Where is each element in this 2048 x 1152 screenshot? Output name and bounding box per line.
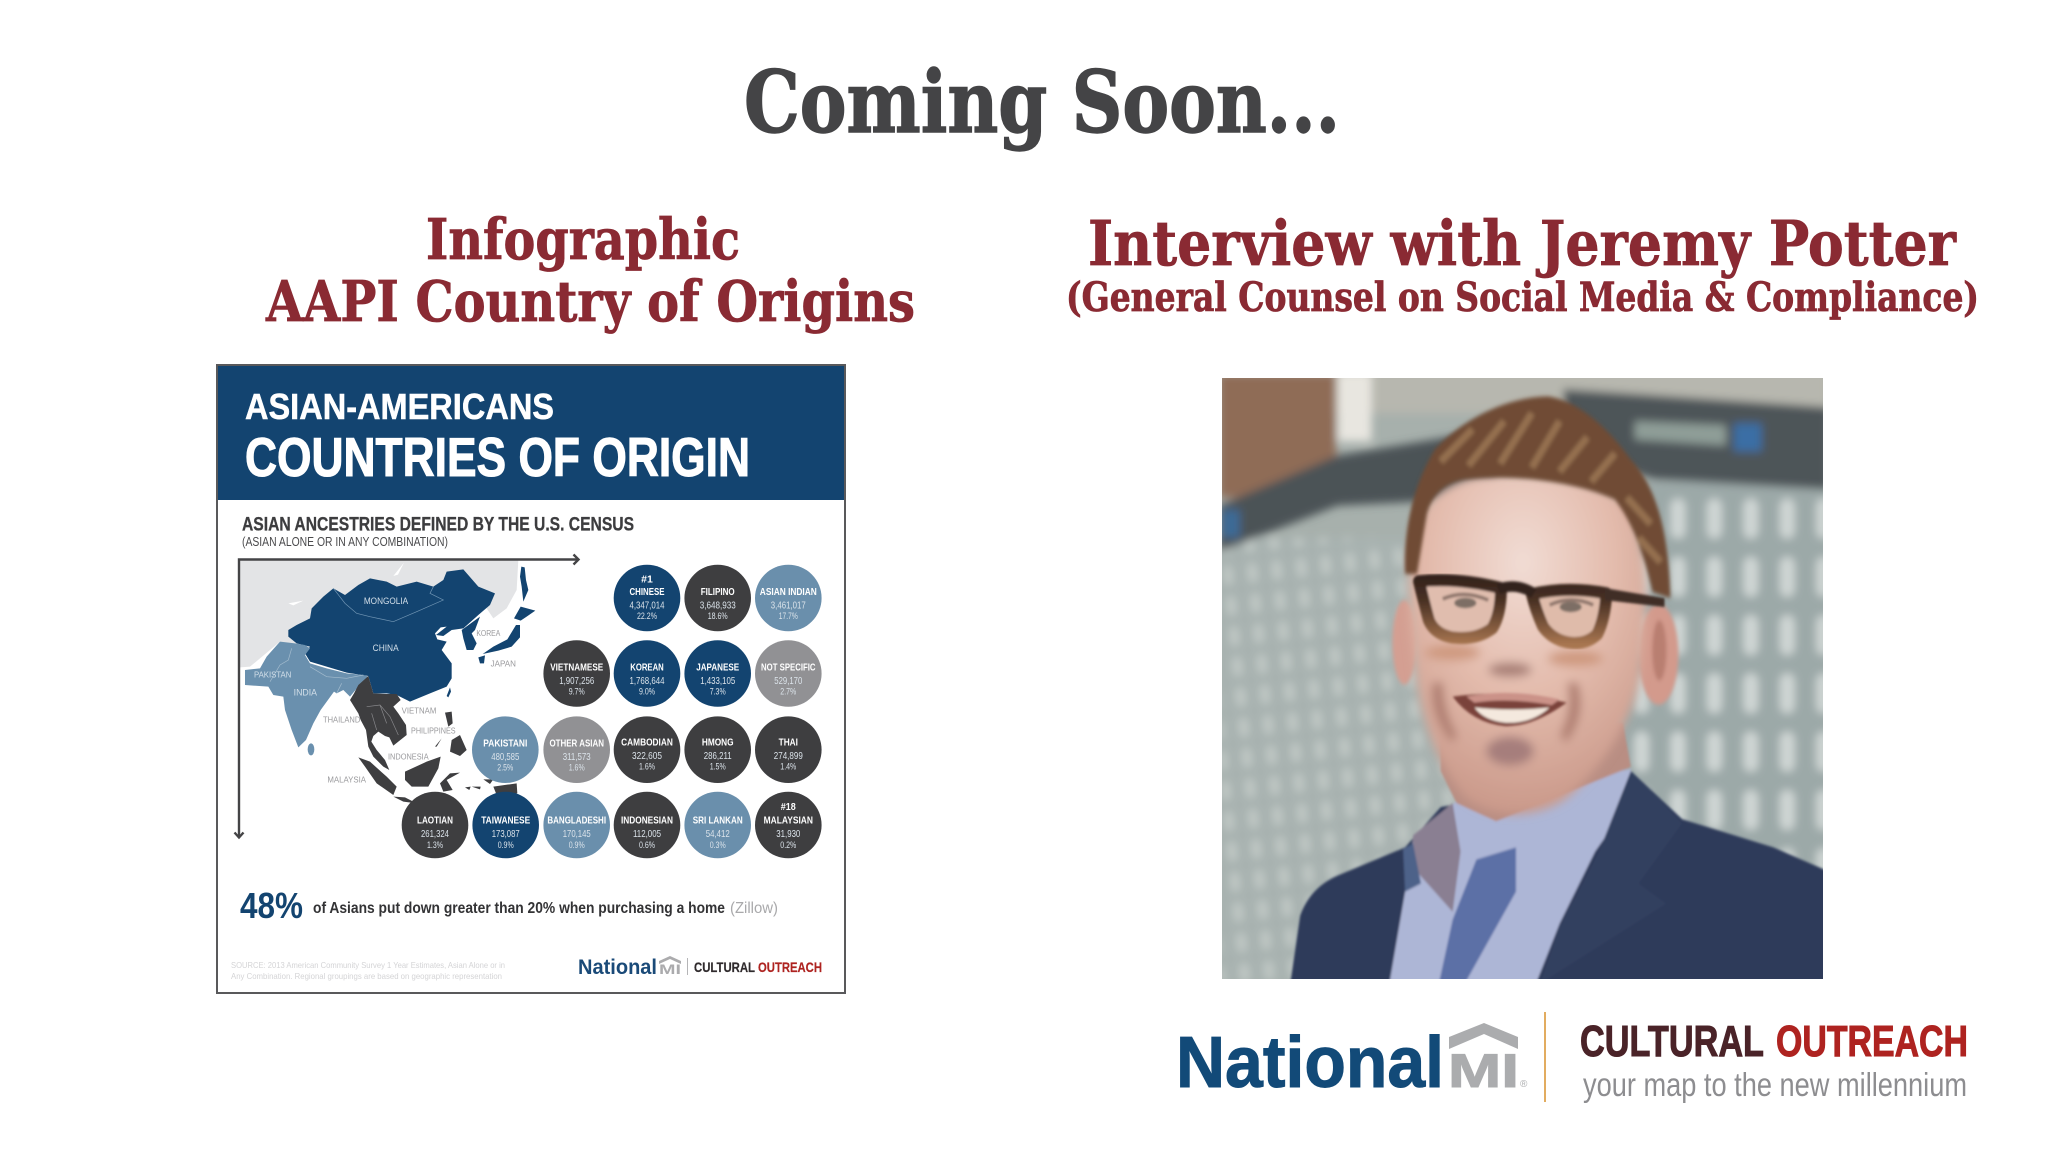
source note: SOURCE: 2013 American Community Survey 1 Year Estimates, Asian Alone or in: [231, 960, 505, 970]
bubble: Other Asian: OTHER ASIAN: [549, 738, 604, 750]
heading: interview: [1066, 207, 1979, 321]
map labels: PAKISTAN: [254, 670, 291, 680]
map labels: INDONESIA: [388, 752, 429, 762]
small logo: National: [578, 956, 657, 979]
bubble: Laotian: 261,324: [421, 828, 449, 840]
bubble: Bangladeshi: BANGLADESHI: [547, 814, 606, 826]
bubble: Asian Indian: ASIAN INDIAN: [760, 586, 817, 598]
map labels: MALAYSIA: [327, 774, 366, 784]
heading: infographic: AAPI Country of Origins: [265, 269, 915, 335]
bubble: Sri Lankan: [684, 792, 751, 858]
card subheading: [242, 514, 634, 549]
bubble: Pakistani: 2.5%: [497, 763, 513, 773]
small logo: [578, 956, 822, 979]
card header band: ASIAN-AMERICANS: [245, 386, 554, 427]
suit and shirt: [1290, 723, 1829, 984]
map labels: KOREA: [476, 628, 501, 638]
bubble: Taiwanese: [472, 792, 539, 858]
bubble: Filipino: 18.6%: [708, 611, 728, 621]
bubble: Not Specific: NOT SPECIFIC: [761, 662, 816, 674]
source note: [231, 960, 505, 981]
bubble: Pakistani: PAKISTANI: [483, 738, 527, 750]
bubble: Taiwanese: TAIWANESE: [481, 814, 530, 826]
bubble: Korean: 9.0%: [639, 686, 655, 696]
ears: [1392, 600, 1678, 705]
map labels: MONGOLIA: [364, 596, 408, 606]
bubble: Chinese: 4,347,014: [630, 599, 665, 611]
bubble: Not Specific: [755, 640, 822, 707]
bubble: Not Specific: 529,170: [774, 675, 802, 687]
bubble: Laotian: [402, 792, 468, 858]
bubble: Thai: 1.4%: [780, 762, 796, 772]
bubble: Sri Lankan: 54,412: [706, 828, 730, 840]
smile: [1453, 693, 1567, 726]
bubble: Malaysian: [755, 792, 822, 858]
bubble: Asian Indian: [755, 565, 822, 631]
bubble: Indonesian: INDONESIAN: [621, 814, 673, 826]
bubble: Sri Lankan: SRI LANKAN: [693, 814, 743, 826]
bubble: Cambodian: 1.6%: [639, 762, 655, 772]
card subheading: (ASIAN ALONE OR IN ANY COMBINATION): [242, 535, 448, 549]
bubble: Cambodian: 322,605: [632, 750, 662, 762]
bubble: Malaysian: #18: [781, 801, 796, 813]
bubble: Korean: [614, 640, 680, 707]
National MI wordmark: National: [1176, 1023, 1444, 1103]
map labels: JAPAN: [491, 659, 516, 669]
bubble: Other Asian: 1.6%: [569, 763, 585, 773]
bubble: Cambodian: CAMBODIAN: [621, 737, 673, 749]
map labels: CHINA: [373, 643, 399, 653]
bubble: Sri Lankan: 0.3%: [710, 840, 726, 850]
bubble: Filipino: FILIPINO: [701, 586, 735, 598]
bubble: Korean: 1,768,644: [630, 675, 665, 687]
map of Asia: [240, 560, 535, 803]
Cultural Outreach wordmark: [1580, 1017, 1968, 1103]
map labels: [254, 596, 516, 784]
bubble: Bangladeshi: [543, 792, 610, 858]
bubble: Asian Indian: 3,461,017: [771, 599, 806, 611]
bubble: Cambodian: [614, 716, 680, 783]
bubble: Thai: THAI: [779, 737, 798, 749]
map labels: INDIA: [294, 688, 317, 698]
bubble: Filipino: [684, 565, 751, 631]
card subheading: ASIAN ANCESTRIES DEFINED BY THE U.S. CENSUS: [242, 514, 634, 536]
bubble: Hmong: [684, 716, 751, 783]
bubble: Hmong: 1.5%: [710, 762, 726, 772]
bubble: Hmong: HMONG: [702, 737, 734, 749]
bubble: Chinese: #1: [641, 573, 653, 585]
statistic callout: of Asians put down greater than 20% when purchasing a home: [313, 900, 725, 917]
bubble: Taiwanese: 173,087: [492, 828, 520, 840]
map labels: THAILAND: [323, 714, 360, 724]
bubble: Asian Indian: 17.7%: [779, 611, 798, 621]
statistic callout: [240, 885, 778, 926]
glasses: [1419, 580, 1664, 643]
bubble: Bangladeshi: 0.9%: [569, 840, 585, 850]
Southeast Asia: [350, 676, 407, 770]
small logo: MI: [659, 961, 681, 977]
bubble: Indonesian: 0.6%: [639, 840, 655, 850]
face: [1409, 474, 1646, 814]
bubble: Laotian: 1.3%: [427, 840, 443, 850]
bubble: Japanese: 7.3%: [710, 686, 726, 696]
panel: infographic card: [217, 365, 845, 993]
National MI wordmark: MI: [1448, 1044, 1519, 1097]
logo divider: [1544, 1012, 1546, 1102]
bubble: Other Asian: [543, 716, 610, 783]
Cultural Outreach wordmark: your map to the new millennium: [1583, 1066, 1967, 1103]
heading: infographic: [265, 207, 915, 335]
card header band: COUNTRIES OF ORIGIN: [245, 426, 750, 488]
bubble: Other Asian: 311,573: [563, 751, 591, 763]
logo: National MI + Cultural Outreach: [1176, 1012, 1968, 1103]
bubble: Pakistani: [472, 716, 539, 783]
photo background: [1219, 369, 1829, 984]
bubble: Hmong: 286,211: [704, 750, 732, 762]
bubble: Thai: [755, 716, 822, 783]
bubble: Indonesian: [614, 792, 680, 858]
axis arrows: [234, 554, 578, 838]
card header band: [218, 366, 844, 500]
Cultural Outreach wordmark: OUTREACH: [1776, 1017, 1968, 1066]
bubble: Vietnamese: 1,907,256: [559, 675, 594, 687]
bubble: Taiwanese: 0.9%: [498, 840, 514, 850]
bubble: Vietnamese: 9.7%: [569, 686, 585, 696]
heading: infographic: Infographic: [426, 207, 740, 273]
source note: Any Combination. Regional groupings are based on geographic representation: [231, 971, 502, 981]
bubble: Chinese: [614, 565, 680, 631]
bubble: Laotian: LAOTIAN: [417, 814, 453, 826]
China and Mongolia: [288, 569, 495, 702]
small logo: OUTREACH: [758, 959, 822, 975]
bubble: Japanese: 1,433,105: [700, 675, 735, 687]
bubble: Vietnamese: [543, 640, 610, 707]
bubble: Bangladeshi: 170,145: [563, 828, 591, 840]
Cultural Outreach wordmark: CULTURAL: [1580, 1017, 1764, 1066]
bubble: Vietnamese: VIETNAMESE: [550, 662, 603, 674]
bubble: Japanese: [684, 640, 751, 707]
bubble: Thai: 274,899: [774, 750, 803, 762]
bubble: Chinese: 22.2%: [637, 611, 657, 621]
bubble: Japanese: JAPANESE: [696, 662, 739, 674]
bubble: Chinese: CHINESE: [630, 586, 664, 598]
bubble: Malaysian: 0.2%: [780, 840, 796, 850]
hair: [1405, 396, 1670, 598]
map labels: PHILIPPINES: [411, 726, 456, 736]
bubble: Korean: KOREAN: [630, 662, 664, 674]
title: Coming Soon...: [744, 53, 1340, 153]
bubble: Malaysian: 31,930: [776, 828, 800, 840]
statistic callout: (Zillow): [730, 900, 778, 917]
bubble: Filipino: 3,648,933: [700, 599, 736, 611]
National MI wordmark: ®: [1520, 1079, 1528, 1090]
South Asia: [245, 642, 368, 747]
Korea and Japan: [462, 617, 480, 650]
small logo: CULTURAL: [694, 959, 755, 975]
photo: Jeremy Potter portrait: [1219, 369, 1829, 984]
bubble: Not Specific: 2.7%: [780, 686, 796, 696]
bubble: Indonesian: 112,005: [633, 828, 661, 840]
map labels: VIETNAM: [402, 705, 436, 715]
bubble: Malaysian: MALAYSIAN: [764, 814, 813, 826]
bubble: Pakistani: 480,585: [491, 751, 519, 763]
statistic callout: 48%: [240, 885, 303, 926]
